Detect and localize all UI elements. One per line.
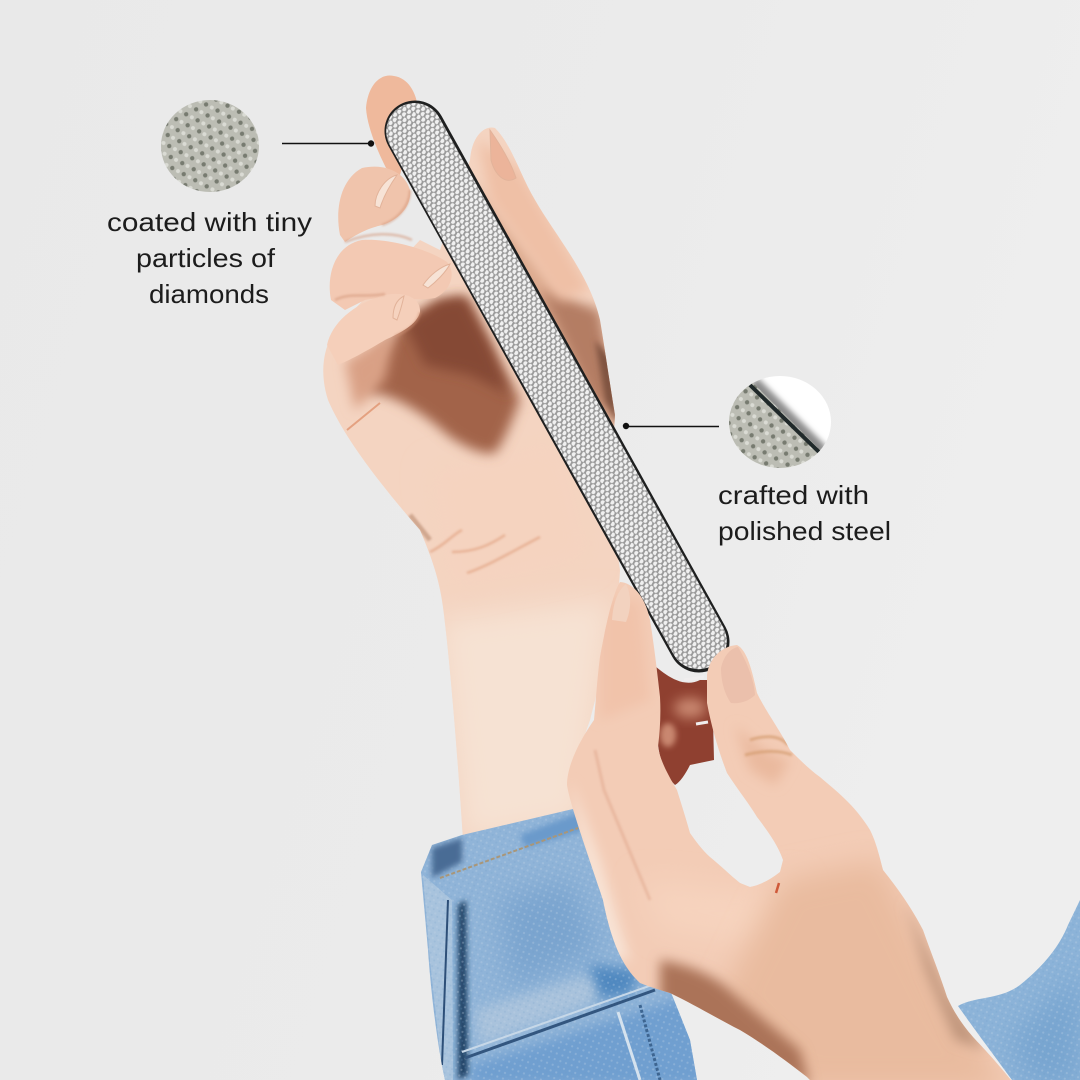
callout text: polished steel [718,516,891,546]
steel rim [415,131,699,642]
fingers behind the file [648,660,714,785]
callout text: crafted with [718,480,869,510]
second finger [338,167,410,242]
callout: polished steel [623,370,891,546]
callout text [718,480,891,546]
nail file [414,131,699,642]
index nail [721,647,755,703]
lower hand [567,582,1015,1080]
third finger [330,240,452,310]
icon: diamond coating swatch [161,100,259,192]
icon: steel edge swatch [729,376,831,468]
callout text: particles of [136,243,276,273]
callout text: diamonds [149,279,269,309]
denim cuff [420,800,705,1080]
leader line [282,140,374,147]
nails [375,130,516,320]
leader line [623,423,719,429]
finger shading [335,190,420,336]
right sleeve [950,900,1080,1080]
upper hand holding the file [323,76,620,840]
thumb nail [612,584,630,622]
finger behind the file top [366,76,418,175]
cuff stitching [440,828,578,878]
scratch mark on web of hand [776,883,779,893]
callout text [107,207,312,309]
callout: diamond particles [107,95,374,309]
diamond-coated surface [414,131,698,641]
callout text: coated with tiny [107,207,312,237]
fourth finger [327,294,420,365]
palm and wrist [323,127,620,840]
